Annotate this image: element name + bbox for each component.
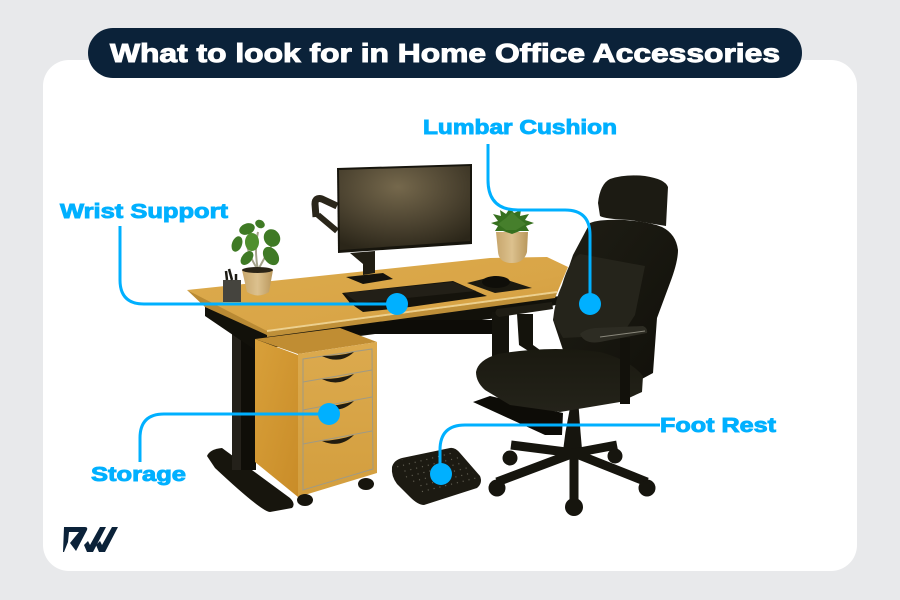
office chair: [473, 175, 678, 515]
callout line: storage: [140, 403, 340, 462]
label: foot rest: Foot Rest: [660, 415, 776, 437]
desk underside and right legs: [205, 296, 560, 350]
monitor arm: [315, 199, 337, 231]
monitor on arm: [315, 164, 472, 284]
near armrest: [580, 326, 647, 404]
chair far armrest: [492, 302, 553, 356]
desk leg left: [207, 325, 294, 512]
chair base: [489, 405, 655, 516]
label: lumbar cushion: Lumbar Cushion: [423, 117, 617, 139]
headrest: [598, 175, 668, 226]
desktop: [187, 257, 568, 337]
backrest: [553, 220, 678, 380]
title pill: [88, 28, 802, 78]
keyboard with wrist rest: [342, 281, 487, 312]
plant left: [230, 218, 283, 296]
callout line: foot rest: [430, 425, 660, 485]
footrest: [392, 448, 481, 505]
seat cushion: [476, 349, 643, 412]
monitor stand: [350, 251, 375, 275]
logo: [63, 527, 118, 552]
drawer unit: [255, 328, 377, 506]
title: What to look for in Home Office Accessories: [110, 38, 780, 68]
label: storage: Storage: [91, 464, 186, 486]
callout line: wrist support: [120, 226, 408, 315]
screen: [337, 164, 472, 253]
callout line: lumbar cushion: [488, 144, 601, 315]
illustration: desk with drawer unit: [187, 257, 568, 512]
label: wrist support: Wrist Support: [60, 201, 228, 223]
plant right: [491, 208, 534, 263]
pen cup: [223, 269, 241, 302]
under-seat foot plate: [473, 396, 563, 435]
mouse and pad: [467, 276, 532, 293]
lumbar cushion: [553, 254, 645, 338]
card: white panel: [43, 60, 857, 571]
